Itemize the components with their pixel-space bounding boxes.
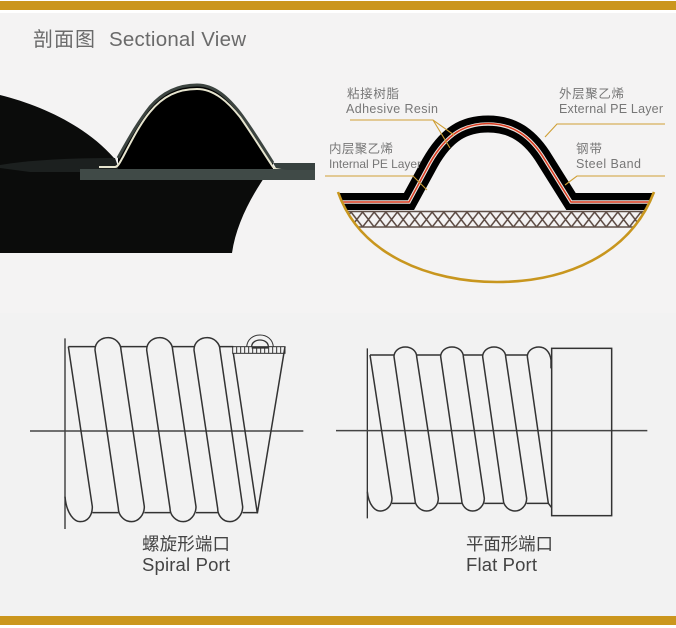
label: Steel Band: Steel Band — [576, 157, 641, 171]
caption: Spiral Port: Spiral Port — [142, 554, 230, 575]
reinforcement mesh — [345, 212, 645, 227]
caption: Flat Port: 平面形端口 — [466, 534, 553, 554]
caption: Spiral Port: 螺旋形端口 — [142, 534, 230, 554]
gold section arc — [338, 192, 654, 282]
caption: Flat Port: Flat Port — [466, 554, 537, 575]
label: Internal PE Layer: 内层聚乙烯 — [329, 142, 393, 156]
label: Steel Band — [576, 142, 641, 171]
label: External PE Layer: External PE Layer — [559, 102, 663, 116]
title: Sectional View: Sectional View — [109, 28, 246, 51]
label: Internal PE Layer: Internal PE Layer — [329, 157, 421, 171]
label: Adhesive Resin: 粘接树脂 — [347, 86, 399, 101]
label: External PE Layer: 外层聚乙烯 — [559, 87, 624, 101]
label: Internal PE Layer — [329, 142, 421, 171]
photo: pipe cross-section — [0, 85, 315, 253]
label: Adhesive Resin: Adhesive Resin — [346, 102, 438, 116]
diagram: layered section of the pipe wall — [330, 124, 660, 282]
label: Steel Band: 钢带 — [576, 142, 602, 156]
top gold bar — [0, 1, 676, 10]
drawing: flat port — [336, 347, 647, 518]
caption: Spiral Port — [142, 534, 230, 575]
leader lines — [325, 120, 665, 190]
drawing: spiral port — [30, 335, 303, 529]
title: Sectional View — [33, 28, 246, 51]
title: Sectional View: 剖面图 — [33, 28, 95, 51]
bottom gold bar — [0, 616, 676, 625]
label: External PE Layer — [559, 87, 663, 116]
caption: Flat Port — [466, 534, 553, 575]
label: Adhesive Resin — [346, 86, 438, 116]
layer stack: PE, adhesive and steel band — [330, 124, 660, 202]
